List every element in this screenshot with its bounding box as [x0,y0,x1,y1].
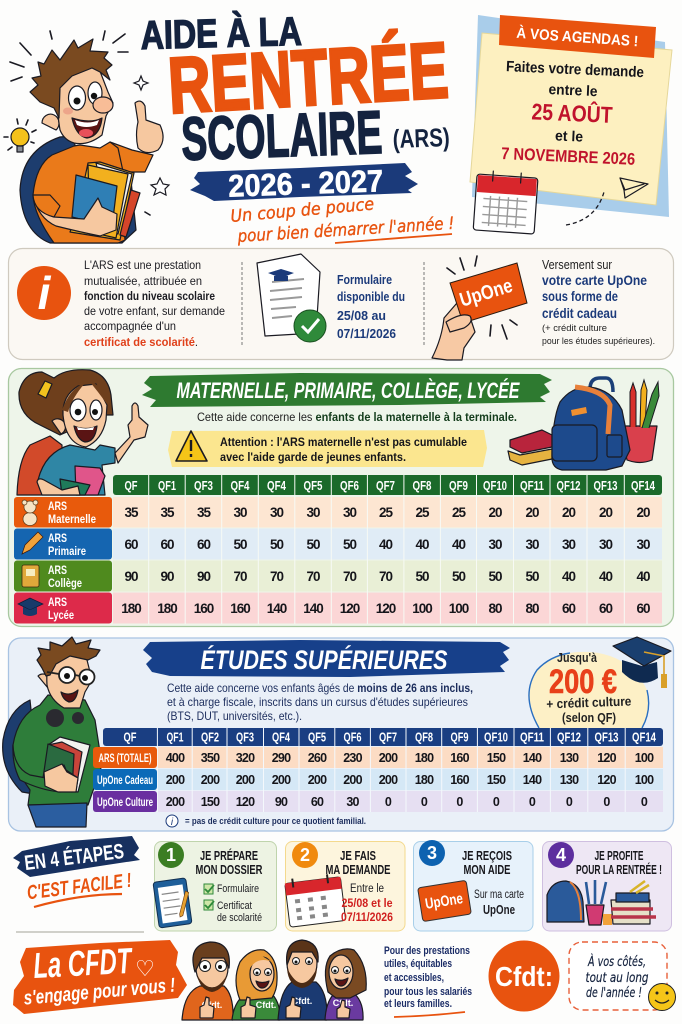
row: maternelle [14,497,650,528]
text: payment [542,258,655,347]
table header: QF11 [520,478,544,493]
text: eligibility: Cette aide concerne vos enfants âgés de moins de 26 ans inclus, [167,681,473,695]
table header: QF13 [594,730,619,744]
title line: scolaire: SCOLAIRE [180,98,383,173]
step 4: JE PROFITE [594,848,644,863]
heading banner: MATERNELLE, PRIMAIRE, COLLÈGE, LYCÉE [176,378,520,403]
tagline [230,195,455,247]
table: school levels [14,475,662,624]
icon: info [17,266,71,320]
row: lycée [14,592,650,624]
table header: QF1 [158,478,176,493]
row: ars total: 100 [635,751,654,765]
row: ars total: 140 [523,751,542,765]
table header: QF6 [340,478,359,493]
row: ars total: 160 [450,751,470,765]
text: form availability: 07/11/2026 [337,326,396,341]
step 3: JE REÇOIS [462,848,512,863]
row: lycée: 120 [340,601,360,616]
note banner text: À VOS AGENDAS ! [516,25,639,50]
table header: QF [124,730,137,744]
row: UpOne cadeau: 200 [343,773,363,787]
callout: at your side: À vos côtés, [587,953,646,970]
row: primaire: Primaire [48,544,86,558]
badge 1: 1 [166,845,176,865]
footnote: i [171,817,174,828]
table header: QF11 [520,730,544,744]
table header: QF7 [376,478,395,493]
text: payment: sous forme de [542,288,618,304]
text: eligibility: et à charge fiscale, inscrits dans un cursus d'études supérieures [167,695,468,709]
row: maternelle: 20 [599,505,612,520]
row: collège: 90 [197,569,210,584]
table header: QF [124,478,138,493]
text: form availability: disponible du [337,289,405,304]
footnote [166,815,366,828]
icon: school supplies [547,880,656,925]
row: maternelle: 35 [197,505,211,520]
row: UpOne cadeau: 200 [201,773,220,787]
heading banner [143,640,510,677]
text: presentation: certificat de scolarité. [84,335,198,349]
row: ars total: 400 [166,751,185,765]
row: collège: Collège [48,576,82,590]
row: collège: 90 [160,569,174,584]
title line: rentrée: RENTRÉE [166,25,451,130]
row: maternelle: 20 [488,505,502,520]
member 2: Cfdt. [256,1000,276,1010]
table header: QF10 [483,478,507,493]
row: ars total: 320 [236,751,255,765]
text: presentation [84,258,225,349]
row: ars total: 230 [343,751,363,765]
row: UpOne cadeau: 200 [166,773,185,787]
banner: cfdt: s'engage pour vous ! [23,974,176,1010]
row: UpOne culture: 120 [236,795,255,809]
row: primaire: 40 [379,537,392,552]
checklist: Formulaire [217,883,259,895]
row: UpOne cadeau: 200 [272,773,291,787]
row: collège: 90 [124,569,138,584]
badge: up to 200 euros: + crédit culture [546,694,632,711]
row: lycée: 100 [449,601,469,616]
checklist: Certificat [217,900,252,912]
row: UpOne cadeau: 130 [560,773,579,787]
text: card: UpOne [483,903,515,917]
callout: at your side [569,942,676,1010]
note text [501,58,644,169]
row: UpOne cadeau: 200 [308,773,327,787]
icon: calendar [473,170,538,234]
panel: school levels [8,368,674,626]
note text: et le [555,128,583,146]
row: primaire: 60 [124,537,138,552]
badge: up to 200 euros: (selon QF) [562,710,616,725]
row: collège: 70 [343,569,356,584]
illustration: girl pointing [17,370,148,495]
row: UpOne culture: UpOne Culture [97,795,153,809]
row: lycée: Lycée [48,608,74,622]
title line: ars: (ARS) [392,122,450,154]
icon: hand with UpOne card [432,256,527,360]
row: primaire: 50 [233,537,247,552]
text: payment: (+ crédit culture [542,323,607,334]
table header: QF13 [594,478,618,493]
text: presentation: L'ARS est une prestation [84,258,201,272]
text: form availability: 25/08 au [337,308,386,323]
heading: in 4 steps [13,836,140,907]
text: dates [341,883,393,924]
row: maternelle: Maternelle [48,512,96,526]
tagline: Un coup de pouce [230,195,375,227]
row: UpOne culture: 90 [275,795,288,809]
row: primaire: 60 [160,537,174,552]
logo: cfdt: Cfdt: [495,961,553,992]
member 1: Cfdt. [202,1000,222,1010]
table header [113,475,662,495]
icon: light bulb [11,128,29,152]
icon: warning [176,431,207,461]
year text: 2026 - 2027 [228,163,384,204]
row: UpOne cadeau: 200 [379,773,398,787]
title [140,9,451,173]
table header: QF6 [344,730,362,744]
member 4 [325,949,366,1020]
row: collège: ARS [48,563,67,577]
row: collège: 50 [488,569,502,584]
member 3: Cfdt. [292,996,312,1006]
table header: QF4 [272,730,290,744]
row: lycée: 180 [157,601,177,616]
warning box: Attention : l'ARS maternelle n'est pas cumulable [220,435,467,449]
member 1 [182,942,233,1020]
row: lycée: 160 [194,601,214,616]
row: ars total: ARS (TOTALE) [98,751,152,765]
text: card [474,889,524,917]
table header: QF8 [415,730,433,744]
table header: QF4 [267,478,287,493]
row: ars total: 200 [379,751,398,765]
row: lycée: 120 [376,601,396,616]
row: primaire: 30 [599,537,612,552]
row: collège: 40 [636,569,650,584]
row: maternelle: 35 [124,505,139,520]
text: commitment [384,945,472,1017]
table header: QF8 [412,478,432,493]
row: collège: 50 [525,569,539,584]
row: UpOne culture: 0 [566,795,573,809]
icon: clipboard [153,878,193,928]
row: collège: 50 [452,569,465,584]
heading banner: ÉTUDES SUPÉRIEURES [200,644,448,675]
badge 4: 4 [556,845,566,865]
table header: QF9 [449,478,468,493]
row: ars total: 350 [201,751,220,765]
row: lycée: 80 [488,601,502,616]
icon: graduation cap [613,637,671,688]
heading banner [142,373,552,407]
row: ars total: 260 [308,751,327,765]
row: primaire [14,528,650,560]
table header: QF5 [304,478,322,493]
note text: 25 AOÛT [531,97,613,128]
row: UpOne culture [93,791,648,812]
table header: QF12 [557,730,581,744]
row: collège: 70 [270,569,283,584]
table header: QF4 [230,478,250,493]
row: collège: 70 [379,569,392,584]
warning box [168,430,487,467]
illustration: four cfdt members [182,940,366,1020]
row: UpOne culture: 0 [421,795,428,809]
table header: QF10 [484,730,508,744]
heading: in 4 steps: EN 4 ÉTAPES [23,840,125,875]
icon: paper plane [620,178,648,198]
row: lycée: 60 [599,601,612,616]
row: maternelle: 20 [636,505,650,520]
arrow [566,192,604,225]
row: maternelle: 25 [379,505,393,520]
note banner [499,15,656,58]
row: primaire: 30 [636,537,650,552]
row: UpOne culture: 0 [385,795,392,809]
table header [103,728,663,746]
icon: UpOne card: UpOne [424,890,464,913]
row: UpOne culture: 0 [493,795,500,809]
subtitle: Cette aide concerne les enfants de la maternelle à la terminale. [197,410,517,424]
text: dates: 25/08 et le [342,896,393,910]
step 4 [542,842,672,931]
icon: calendar [284,873,346,927]
note text: Faites votre demande [506,58,644,81]
text: commitment: Pour des prestations [384,945,470,957]
table header: QF3 [194,478,213,493]
step 1: MON DOSSIER [196,862,263,877]
row: lycée: 80 [525,601,539,616]
row: collège: 70 [233,569,247,584]
text: form availability: Formulaire [337,272,392,287]
row: lycée: 140 [303,601,323,616]
row: ars total: 150 [487,751,506,765]
text: commitment: et leurs familles. [384,998,452,1010]
text: eligibility: (BTS, DUT, universités, etc.). [167,709,302,723]
icon: sparkle stars [134,76,169,195]
table header: QF5 [308,730,326,744]
row: UpOne culture: 0 [529,795,536,809]
text: payment: crédit cadeau [542,305,617,321]
row: maternelle: 20 [562,505,575,520]
row: lycée: 60 [562,601,575,616]
year banner [190,163,418,204]
step 2: JE FAIS [340,848,376,863]
row: lycée: ARS [48,595,67,609]
text: dates: Entre le [350,883,384,895]
row: UpOne culture: 150 [201,795,220,809]
row: UpOne cadeau: 150 [487,773,506,787]
row: maternelle: 35 [160,505,175,520]
row: UpOne culture: 0 [456,795,463,809]
text: eligibility [167,681,473,723]
text: commitment: utiles, équitables [384,958,452,970]
row: maternelle: 30 [306,505,320,520]
badge: up to 200 euros: 200 € [549,663,617,701]
panel: dates note [470,15,672,234]
row: ars total [93,747,654,768]
heading accent: C'EST FACILE ! [26,870,133,904]
step 1 [153,842,276,931]
row: UpOne cadeau: 200 [236,773,255,787]
row: maternelle: 30 [270,505,283,520]
table header: QF14 [631,478,656,493]
illustration: student [3,637,102,827]
callout: at your side: tout au long [586,970,649,986]
row: primaire: 50 [270,537,283,552]
text: presentation: mutualisée, attribuée en [84,274,202,288]
text: commitment: pour tous les salariés [384,986,472,998]
table header: QF2 [201,730,219,744]
title line: aide à la: AIDE À LA [140,9,302,58]
table header: QF7 [379,730,397,744]
footnote: = pas de crédit culture pour ce quotient familial. [185,816,366,826]
row: maternelle: 25 [452,505,466,520]
banner: cfdt [13,940,187,1014]
row: primaire: 50 [343,537,356,552]
row: lycée: 180 [121,601,141,616]
row: UpOne cadeau: 100 [635,773,654,787]
banner: cfdt: La CFDT [32,940,134,986]
row: collège: 40 [562,569,575,584]
icon: hand with UpOne card: UpOne [457,275,515,312]
table header: QF9 [450,730,469,744]
row: primaire: 30 [488,537,502,552]
row: maternelle: ARS [48,499,67,513]
row: UpOne culture: 60 [311,795,324,809]
row: maternelle: 20 [525,505,539,520]
text: card: Sur ma carte [474,889,524,901]
row: UpOne cadeau [93,769,654,790]
text: presentation: de votre enfant, sur demande [84,304,225,318]
checklist: de scolarité [217,912,262,924]
table header: QF3 [236,730,254,744]
row: collège: 50 [415,569,429,584]
panel: info [8,248,674,360]
member 4: Cfdt. [333,998,353,1008]
row: lycée: 140 [267,601,287,616]
step 3 [414,840,533,931]
row: primaire: 40 [452,537,465,552]
row: maternelle: 25 [415,505,430,520]
row: ars total: 290 [272,751,291,765]
text: presentation: accompagnée d'un [84,319,176,333]
callout: at your side: de l'année ! [586,985,642,1001]
member 3 [278,940,327,1020]
illustration: boy with thumb up [4,31,163,243]
row: UpOne cadeau: UpOne Cadeau [97,773,153,787]
panel: higher education [3,637,673,831]
badge: up to 200 euros [529,651,649,728]
step 2 [284,842,405,931]
row: collège: 70 [306,569,320,584]
text: payment: Versement sur [542,258,612,272]
row: primaire: ARS [48,531,67,545]
row: UpOne culture: 30 [346,795,359,809]
note text: 7 NOVEMBRE 2026 [501,144,636,169]
row: collège: 40 [599,569,612,584]
row: UpOne cadeau: 120 [597,773,617,787]
row: maternelle: 30 [233,505,247,520]
row: ars total: 130 [560,751,579,765]
row: lycée: 100 [412,601,432,616]
text: commitment: et accessibles, [384,972,444,984]
tagline: pour bien démarrer l'année ! [236,214,455,247]
row: UpOne cadeau: 160 [450,773,470,787]
row: UpOne cadeau: 180 [415,773,434,787]
row: primaire: 60 [197,537,210,552]
step 2: MA DEMANDE [326,862,391,877]
checklist [204,883,262,924]
row: UpOne culture: 0 [641,795,648,809]
table header: QF14 [632,730,656,744]
row: ars total: 120 [597,751,617,765]
row: ars total: 180 [415,751,434,765]
row: lycée: 60 [636,601,650,616]
member 2 [232,950,280,1020]
icon: info: i [38,267,52,319]
note text: entre le [548,82,598,100]
text: dates: 07/11/2026 [341,910,393,924]
row: lycée: 160 [230,601,250,616]
step 3: MON AIDE [464,862,511,877]
badge 2: 2 [300,845,310,865]
icon: form document [257,254,326,342]
row: maternelle: 30 [343,505,356,520]
row: UpOne cadeau: 140 [523,773,542,787]
badge: up to 200 euros: Jusqu'à [557,651,597,665]
row: primaire: 30 [525,537,539,552]
row: UpOne culture: 200 [166,795,185,809]
table header: QF12 [556,478,580,493]
text: payment: votre carte UpOne [542,272,647,288]
text: payment: pour les études supérieures). [542,336,655,347]
icon: smiley [648,984,676,1010]
badge 3: 3 [427,843,437,863]
row: UpOne culture: 0 [603,795,610,809]
banner: cfdt: ♡ [135,956,155,981]
logo: cfdt [488,940,560,1012]
step 1: JE PRÉPARE [200,848,258,863]
text: form availability [337,272,405,341]
row: collège [14,560,650,592]
warning box: avec l'aide garde de jeunes enfants. [220,450,406,464]
row: primaire: 50 [306,537,320,552]
row: primaire: 30 [562,537,575,552]
table header: QF1 [166,730,184,744]
text: presentation: fonction du niveau scolaire [84,289,215,303]
row: primaire: 40 [415,537,429,552]
table: higher education [93,728,663,812]
illustration: backpack and supplies [508,378,659,470]
